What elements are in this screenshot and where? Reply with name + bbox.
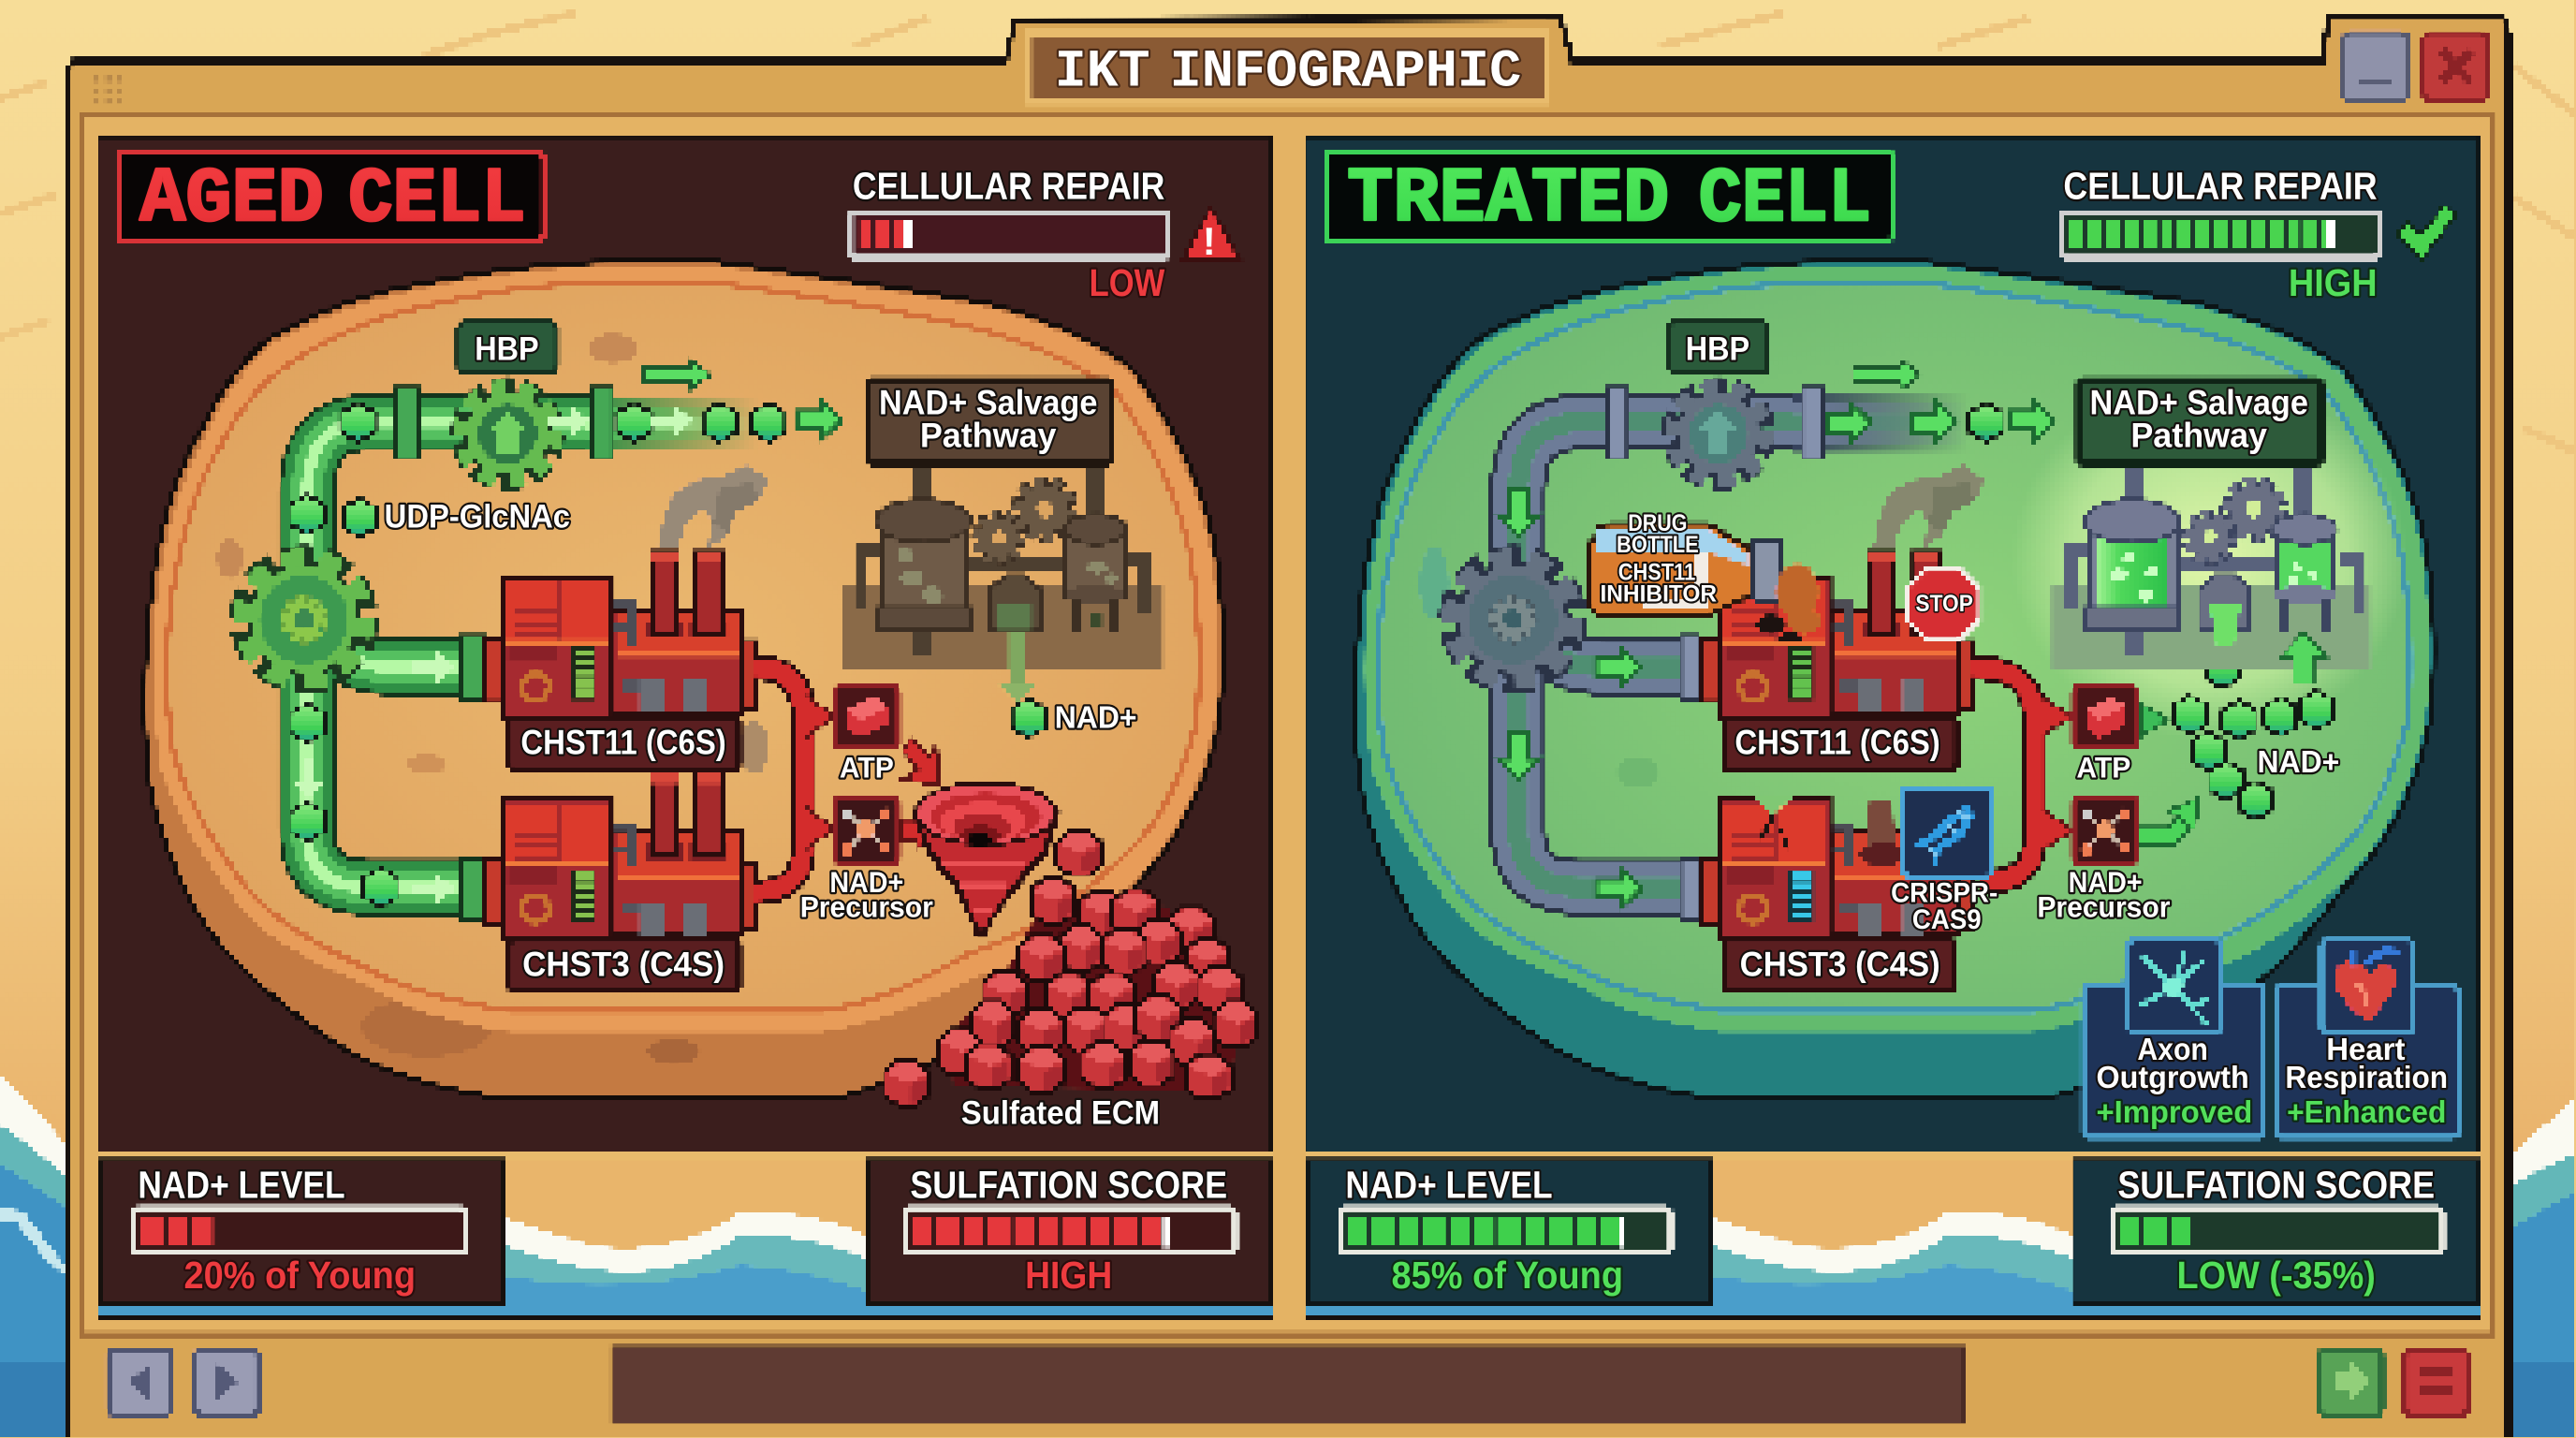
- heading: aged cell: AGED: [139, 155, 324, 243]
- damage: CHST3 cut and stump: [1751, 796, 1906, 866]
- cellular repair bar: low: [851, 212, 1168, 258]
- cellular repair bar: high: [2062, 212, 2378, 258]
- beach strip under aged panel: [98, 1152, 1271, 1320]
- label: cellular repair aged: CELLULAR REPAIR: [853, 164, 1164, 207]
- stat: sulfation score aged: SULFATION SCORE: [910, 1164, 1227, 1207]
- smoke: CHST11: [657, 465, 768, 550]
- label: NAD+ precursor aged: NAD+: [829, 865, 903, 899]
- stat: NAD+ level aged: NAD+ LEVEL: [138, 1164, 345, 1207]
- card value: improved: +Improved: [2097, 1095, 2252, 1130]
- heading: treated cell: TREATED: [1347, 155, 1669, 243]
- panel background: [1306, 137, 2479, 1152]
- funnel: sulfation vortex: [910, 781, 1061, 938]
- title plate: [1029, 33, 1547, 102]
- icon: ATP: [2073, 687, 2137, 748]
- NAD+ molecule: [1010, 697, 1047, 740]
- salvage sign: [2078, 379, 2321, 463]
- pipe network: green HBP flow: [307, 396, 764, 888]
- flow arrows: [1493, 357, 2058, 914]
- label: NAD+ aged: NAD+: [1055, 701, 1137, 736]
- label: NAD+ precursor treated: Precursor: [2037, 890, 2170, 924]
- label: sulfated ECM: Sulfated ECM: [961, 1095, 1160, 1132]
- close button: [2423, 33, 2489, 100]
- gear: idle branch: [1452, 559, 1574, 681]
- beach strip under treated panel: [1306, 1152, 2479, 1320]
- label: stop: STOP: [1915, 592, 1973, 617]
- stat: sulfation score treated: SULFATION SCORE: [2117, 1164, 2435, 1207]
- label: drug bottle: CHST11: [1618, 561, 1695, 586]
- label: CHST3 aged: CHST3 (C4S): [522, 946, 724, 984]
- label: CRISPR-Cas9: CAS9: [1912, 904, 1982, 935]
- minimise button: [2343, 33, 2408, 100]
- label: HBP: HBP: [475, 330, 539, 367]
- pipe flanges: [1606, 388, 1823, 920]
- smoke: CHST11 treated: [1873, 465, 1984, 550]
- card text: axon outgrowth: Axon: [2137, 1033, 2208, 1067]
- label: NAD+ precursor aged: Precursor: [800, 890, 933, 924]
- label: CHST11 aged: CHST11 (C6S): [520, 724, 726, 762]
- status lights: CHST11 treated: [1788, 648, 1814, 700]
- card: heart respiration: [2277, 940, 2458, 1137]
- button: next: [196, 1349, 258, 1415]
- arrow: precursor to funnel: [900, 810, 938, 850]
- title: IKT: [1055, 41, 1150, 101]
- red pipe: [1969, 668, 2034, 883]
- icon: heart: [2321, 940, 2413, 1032]
- label: HBP treated: HBP: [1686, 330, 1749, 367]
- factory: CHST11: [485, 552, 755, 718]
- drug splatter on CHST11: [1756, 564, 1821, 642]
- stat panel: NAD+ level treated: [1308, 1160, 1710, 1303]
- label: NAD+ salvage pathway treated: Pathway: [2130, 416, 2268, 454]
- icon: check mark: [2395, 205, 2456, 259]
- stat value: low sulfation: LOW (-35%): [2177, 1254, 2376, 1297]
- factory: CHST3 treated: [1702, 799, 1973, 940]
- arrows to ATP and precursor: [805, 696, 835, 850]
- label plate: CHST11: [509, 718, 739, 770]
- card text: heart respiration: Respiration: [2285, 1061, 2448, 1095]
- salvage machine: dormant: [842, 461, 1164, 668]
- icon: ATP: [835, 687, 899, 748]
- value: low: LOW: [1090, 261, 1165, 304]
- flow arrows: [294, 357, 844, 903]
- gear: branch point: [243, 559, 365, 681]
- label plate: CHST3: [509, 940, 739, 991]
- salvage sign: [868, 379, 1110, 463]
- label: ATP aged: ATP: [840, 750, 894, 784]
- arrow: salvage up: [2280, 633, 2326, 683]
- value: high: HIGH: [2289, 261, 2378, 304]
- arrow: ATP to funnel: [902, 738, 940, 785]
- label: NAD+ salvage pathway aged: NAD+ Salvage: [879, 383, 1097, 421]
- grip dots: [94, 76, 124, 105]
- drug bottle: [1590, 524, 1782, 615]
- label: NAD+ salvage pathway aged: Pathway: [920, 416, 1057, 454]
- arrows to ATP and precursor: [2041, 697, 2073, 851]
- label: cellular repair treated: CELLULAR REPAIR: [2063, 164, 2378, 207]
- stat value: high sulfation: HIGH: [1025, 1254, 1112, 1297]
- label: NAD+ salvage pathway treated: NAD+ Salvage: [2089, 383, 2308, 421]
- status lights: CHST3 treated: [1788, 870, 1814, 922]
- icon: CRISPR-Cas9 DNA helix: [1902, 787, 1993, 876]
- green trickle from salvage machine: [997, 631, 1036, 703]
- factory: CHST3: [485, 774, 755, 940]
- arrow: precursor to NAD+: [2139, 799, 2198, 836]
- status lights: CHST11: [570, 648, 596, 700]
- warning mark: !: [1203, 219, 1216, 263]
- label: CRISPR-Cas9: CRISPR-: [1891, 878, 1998, 909]
- icon: neuron: [2128, 940, 2221, 1032]
- panel: aged cell: [98, 137, 1271, 1320]
- stat value: 20% of young: 20% of Young: [184, 1254, 416, 1297]
- icon: NAD+ precursor: [835, 799, 899, 863]
- stat: NAD+ level treated: NAD+ LEVEL: [1345, 1164, 1553, 1207]
- gear: idle HBP: [1672, 388, 1765, 480]
- factory: CHST11 treated: [1702, 552, 1973, 718]
- text layer: [138, 41, 2448, 1297]
- card text: heart respiration: Heart: [2326, 1033, 2405, 1067]
- button: stop: [2405, 1349, 2467, 1415]
- label: CHST11 treated: CHST11 (C6S): [1734, 724, 1940, 762]
- UDP-GlcNAc molecules: [288, 401, 788, 909]
- label: CHST3 treated: CHST3 (C4S): [1740, 946, 1940, 984]
- status lights: CHST3: [570, 870, 596, 922]
- icon: warning triangle: [1183, 207, 1240, 259]
- stat panel: sulfation score aged: [868, 1160, 1270, 1303]
- heading box: aged cell: [118, 153, 544, 240]
- stat panel: NAD+ level aged: [102, 1160, 503, 1303]
- stat value: 85% of young: 85% of Young: [1392, 1254, 1623, 1297]
- heading box: treated cell: [1325, 153, 1893, 240]
- label: drug bottle: INHIBITOR: [1600, 581, 1717, 607]
- icon: NAD+ precursor: [2073, 799, 2137, 863]
- label: NAD+ precursor treated: NAD+: [2069, 865, 2143, 899]
- label plate: CHST11: [1723, 718, 1956, 770]
- panel: treated cell: [1306, 137, 2479, 1320]
- label: UDP-GlcNAc: UDP-GlcNAc: [385, 498, 570, 535]
- button: previous: [109, 1349, 171, 1415]
- heading: treated cell: CELL: [1699, 155, 1871, 243]
- card: axon outgrowth: [2083, 940, 2264, 1137]
- pile of sulfated ECM cubes: [882, 829, 1260, 1108]
- label: ATP treated: ATP: [2076, 750, 2130, 784]
- stop sign: [1908, 567, 1980, 641]
- button: go: [2320, 1349, 2382, 1415]
- status bar: [613, 1347, 1965, 1423]
- gear: HBP pathway: [461, 388, 554, 480]
- HBP tag: [1669, 322, 1767, 373]
- title: INFOGRAPHIC: [1170, 41, 1521, 101]
- pipe flanges: [396, 388, 613, 920]
- NAD+ molecule cluster: [2141, 648, 2335, 822]
- cell: treated: [1355, 261, 2434, 1099]
- heading: aged cell: CELL: [348, 155, 526, 243]
- pipe network: idle grey: [1518, 394, 1975, 888]
- HBP tag: [459, 322, 557, 373]
- salvage machine: active: [2052, 461, 2371, 668]
- card text: axon outgrowth: Outgrowth: [2097, 1061, 2249, 1095]
- glow around salvage machine: [2012, 378, 2407, 740]
- label plate: CHST3: [1723, 940, 1955, 991]
- cell: aged: [144, 261, 1223, 1099]
- card value: enhanced: +Enhanced: [2287, 1095, 2446, 1130]
- ocean: right shore: [2509, 1098, 2576, 1438]
- ocean: left shore: [0, 1077, 67, 1438]
- label: drug bottle: BOTTLE: [1617, 533, 1699, 558]
- bottom toolbar: [109, 1347, 2467, 1423]
- label: drug bottle: DRUG: [1628, 511, 1687, 536]
- red pipe: output of enzymes: [753, 668, 803, 892]
- stat panel: sulfation score treated: [2073, 1160, 2478, 1303]
- panel background: [98, 137, 1271, 1152]
- label: NAD+ treated: NAD+: [2258, 745, 2339, 780]
